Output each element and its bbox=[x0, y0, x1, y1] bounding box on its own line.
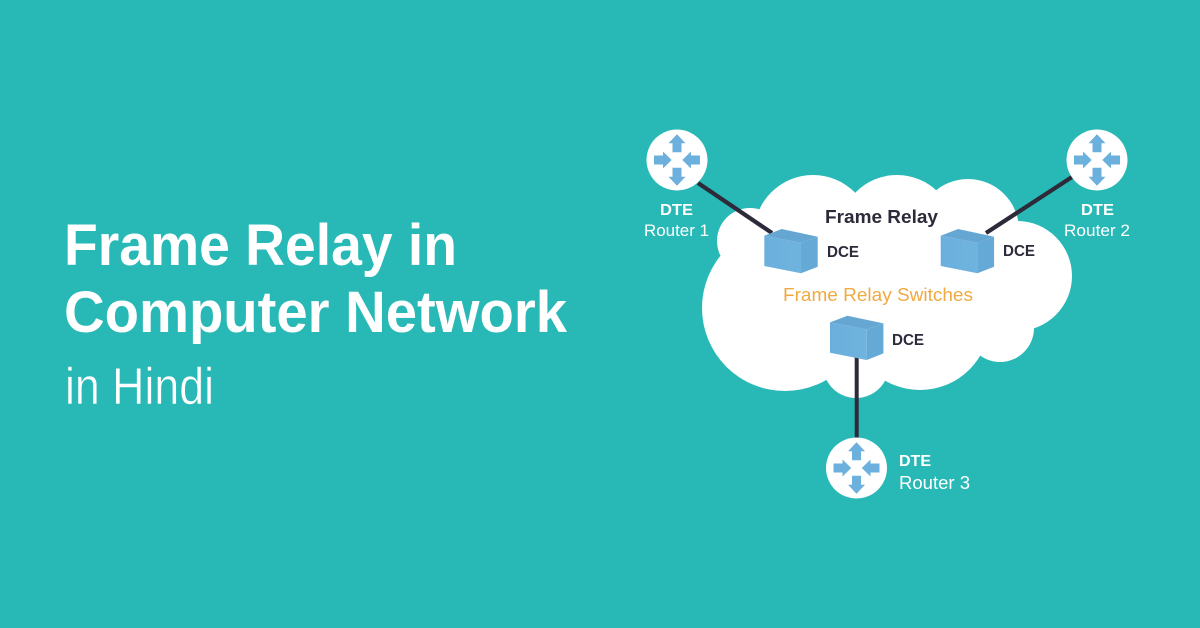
label: Frame Relay: Frame Relay bbox=[825, 207, 938, 227]
label: router 2: Router 2 bbox=[1064, 221, 1130, 240]
icon: router 1 bbox=[646, 130, 708, 190]
label: router 1: DTE bbox=[660, 202, 693, 219]
label: DCE 1: DCE bbox=[827, 244, 859, 261]
label: router 2 bbox=[1064, 202, 1130, 240]
label: router 1: Router 1 bbox=[644, 221, 709, 240]
icon: switch 2 bbox=[941, 229, 994, 273]
label: router 1 bbox=[644, 202, 709, 240]
icon: switch 3 bbox=[830, 316, 883, 360]
label: router 3: DTE bbox=[899, 453, 931, 470]
label: DCE 3: DCE bbox=[892, 332, 924, 349]
icon: router 2 bbox=[1066, 130, 1128, 190]
label: router 3 bbox=[899, 453, 970, 493]
link: router 2 to switch bbox=[986, 177, 1072, 233]
title: Computer Network bbox=[64, 280, 568, 345]
title: in Hindi bbox=[65, 358, 214, 416]
title bbox=[64, 213, 568, 416]
label: router 2: DTE bbox=[1081, 202, 1114, 219]
title: Frame Relay in bbox=[64, 213, 457, 278]
icon: router 3 bbox=[826, 438, 887, 498]
icon: switch 1 bbox=[764, 229, 818, 273]
link: router 1 to switch bbox=[698, 183, 772, 233]
link: router 3 to switch bbox=[855, 355, 859, 438]
label: Frame Relay Switches: Frame Relay Switches bbox=[783, 285, 973, 305]
label: DCE 2: DCE bbox=[1003, 243, 1035, 260]
label: router 3: Router 3 bbox=[899, 473, 970, 493]
cloud bbox=[702, 175, 1072, 398]
